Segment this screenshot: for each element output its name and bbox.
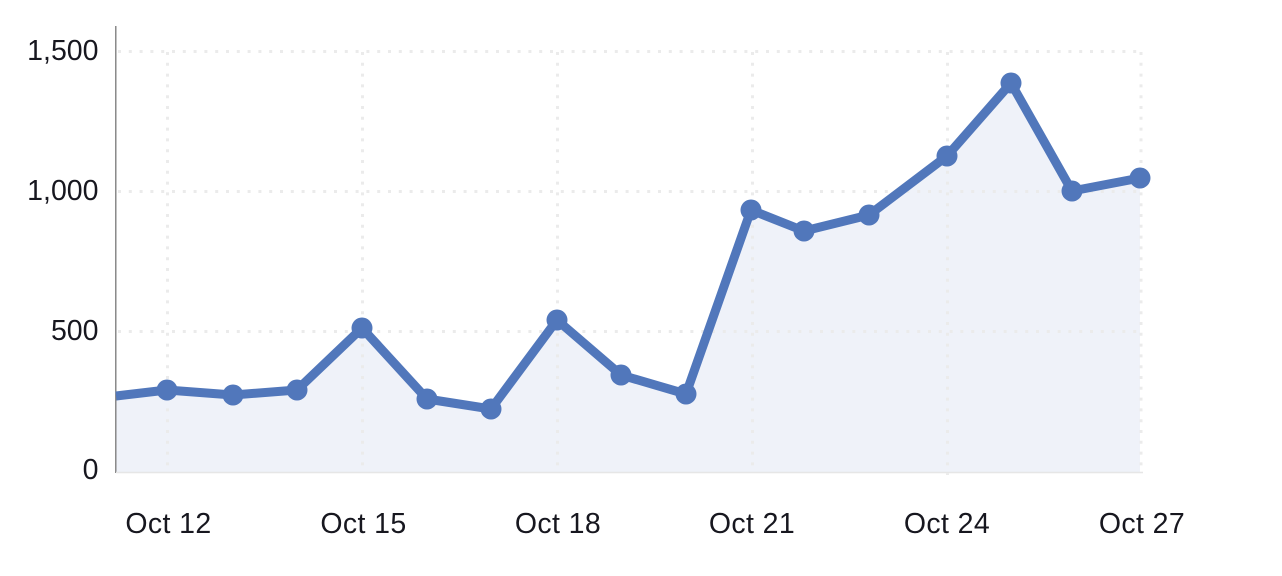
y axis labels: 500 <box>51 315 98 347</box>
data line <box>116 83 1140 409</box>
x axis labels: Oct 21 <box>709 508 795 540</box>
x axis labels: Oct 24 <box>904 508 990 540</box>
y axis labels: 1,000 <box>27 175 98 207</box>
area fill under line <box>116 83 1140 473</box>
y axis line <box>115 26 117 473</box>
x axis labels: Oct 18 <box>515 508 601 540</box>
x axis labels <box>125 508 1185 540</box>
y axis labels: 1,500 <box>27 35 98 67</box>
x axis labels: Oct 15 <box>320 508 407 540</box>
data points <box>156 72 1150 420</box>
y axis labels: 0 <box>83 454 98 486</box>
gridlines <box>118 52 1142 475</box>
x axis line <box>116 472 1143 474</box>
x axis labels: Oct 27 <box>1099 508 1185 540</box>
x axis labels: Oct 12 <box>125 508 212 540</box>
y axis labels <box>27 35 98 486</box>
